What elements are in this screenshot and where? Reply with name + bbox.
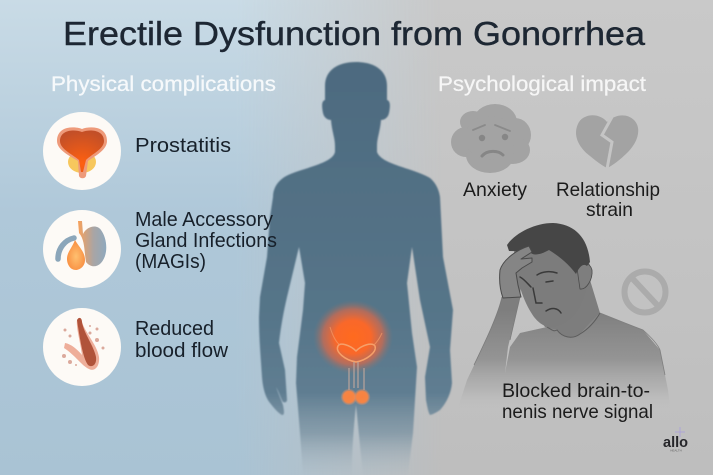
- icon: prohibited sign: [624, 272, 666, 312]
- pelvic inflammation glow: [313, 300, 393, 406]
- hair: [507, 223, 590, 274]
- central body silhouette: [259, 62, 453, 475]
- hand: [500, 246, 532, 298]
- label: blocked nerve signal: nenis nerve signal: [502, 401, 653, 423]
- label: blocked nerve signal: Blocked brain-to-: [502, 380, 650, 402]
- torso: [505, 313, 670, 408]
- label: relationship strain: strain: [586, 199, 633, 221]
- label: reduced blood flow: blood flow: [135, 339, 228, 362]
- icon: accessory glands: [43, 210, 121, 288]
- icon: prostate: [43, 112, 121, 190]
- label: relationship strain: [556, 179, 660, 221]
- label: reduced blood flow: Reduced: [135, 317, 214, 340]
- label: prostatitis: Prostatitis: [135, 134, 231, 157]
- arm: [458, 270, 522, 408]
- neck: [540, 280, 600, 337]
- label: anxiety: Anxiety: [463, 179, 527, 201]
- title: Erectile Dysfunction from Gonorrhea: [63, 15, 646, 52]
- label: relationship strain: Relationship: [556, 179, 660, 201]
- label: MAGIs: Gland Infections: [135, 229, 277, 252]
- label: MAGIs: Male Accessory: [135, 208, 274, 231]
- face: [514, 236, 590, 327]
- icon: anxiety cloud: [451, 104, 531, 173]
- logo: HEALTH: [670, 448, 682, 452]
- label: reduced blood flow: [135, 317, 228, 362]
- label: MAGIs: (MAGIs): [135, 250, 206, 273]
- ear: [577, 263, 592, 289]
- heading: physical complications: Physical complications: [51, 73, 276, 96]
- logo: [663, 427, 688, 452]
- label: blocked nerve signal: [502, 380, 653, 423]
- label: MAGIs: [135, 208, 277, 273]
- logo: allo: [663, 434, 688, 451]
- icon: blood vessel: [43, 308, 121, 386]
- heading: psychological impact: Psychological impact: [438, 73, 646, 96]
- icon: broken heart: [576, 115, 638, 169]
- illustration: distressed man: [458, 223, 670, 408]
